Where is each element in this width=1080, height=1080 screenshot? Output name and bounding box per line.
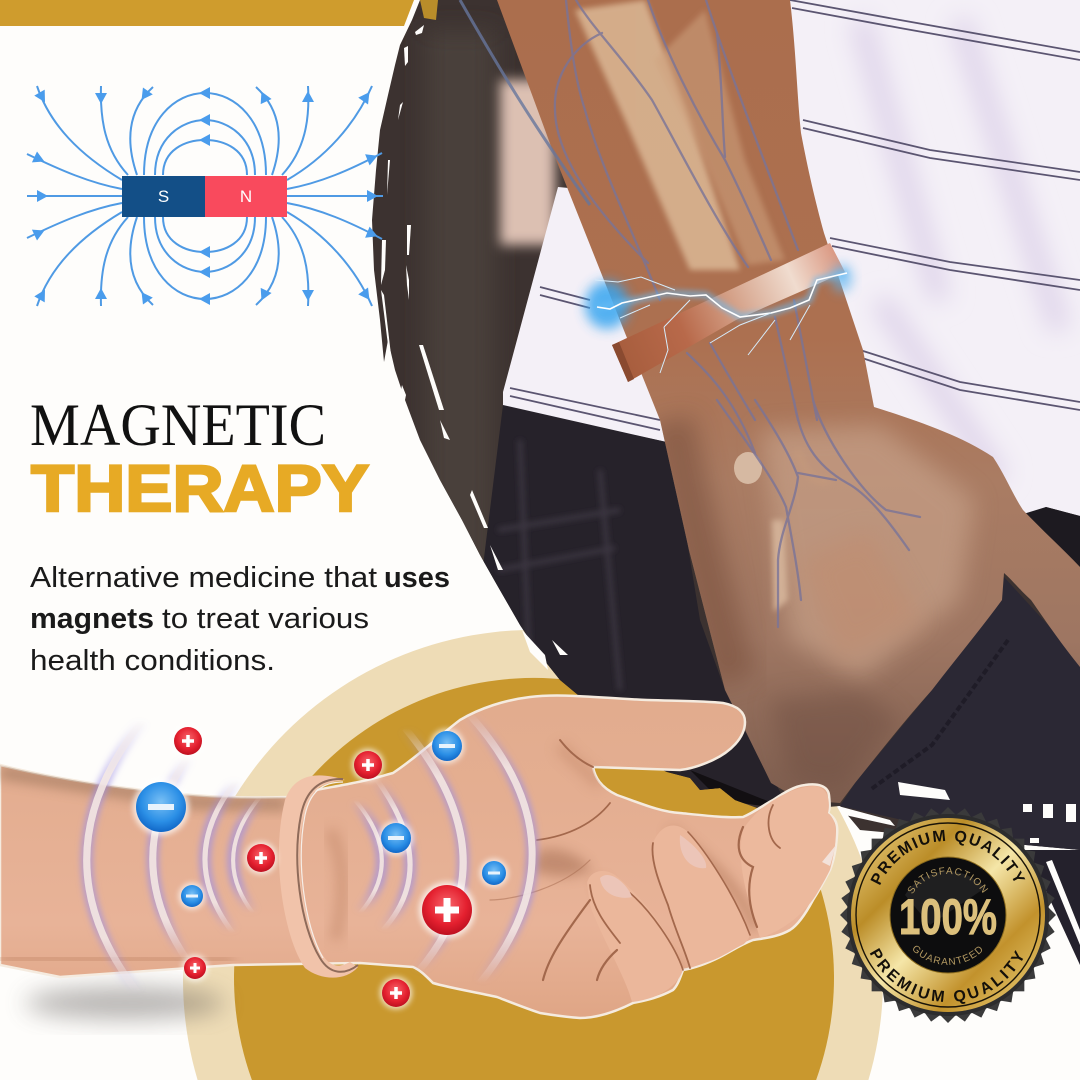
description text [30,562,450,677]
description text: magnets [30,603,154,635]
palm and finger shading [0,745,836,1002]
title: MAGNETIC [30,392,326,458]
premium quality badge [840,807,1056,1023]
premium quality badge: SATISFACTION [908,867,988,894]
lightning [585,264,852,373]
title [30,392,369,525]
thumb tip [741,786,836,938]
magnetic field diagram [27,86,383,306]
copper cuff bracelet [612,243,845,382]
premium quality badge: PREMIUM QUALITY [870,948,1024,1004]
finger creases [490,740,780,980]
premium quality badge: PREMIUM QUALITY [870,830,1026,885]
premium quality badge: GUARANTEED [913,946,982,965]
title: THERAPY [31,451,369,525]
rose-gold bangle [279,775,358,978]
premium quality badge: 100% [899,889,997,945]
bar magnet: N [240,187,252,206]
brush speckles [381,25,568,670]
photo: man's arm in brush mask [360,0,1080,860]
finger nails [600,835,836,898]
curled finger A [587,871,683,1002]
top gold bar [0,0,414,26]
hand and forearm with bracelet [0,695,837,1018]
description text: health conditions. [30,645,275,677]
description text: Alternative medicine that [30,562,377,594]
energy wave arcs [87,713,532,993]
field arrows [32,87,380,305]
gold brush fleck [420,0,438,20]
bar magnet: S [158,187,169,206]
minus ions [136,731,506,907]
trousers [480,405,1080,860]
curled finger B [653,825,750,968]
description text: to treat various [162,603,369,635]
bottom-right ragged stripes [838,782,1080,965]
shirt [503,0,1080,530]
bar magnet [122,176,287,217]
description text: uses [384,562,450,594]
concentric gold circles [183,630,883,1080]
ions: positive and negative charges [133,725,508,1009]
field lines [27,86,383,306]
plus ions [174,727,472,1007]
veins [555,0,920,627]
lower arm shadow [25,987,225,1019]
man's forearm and hand [460,0,1080,803]
